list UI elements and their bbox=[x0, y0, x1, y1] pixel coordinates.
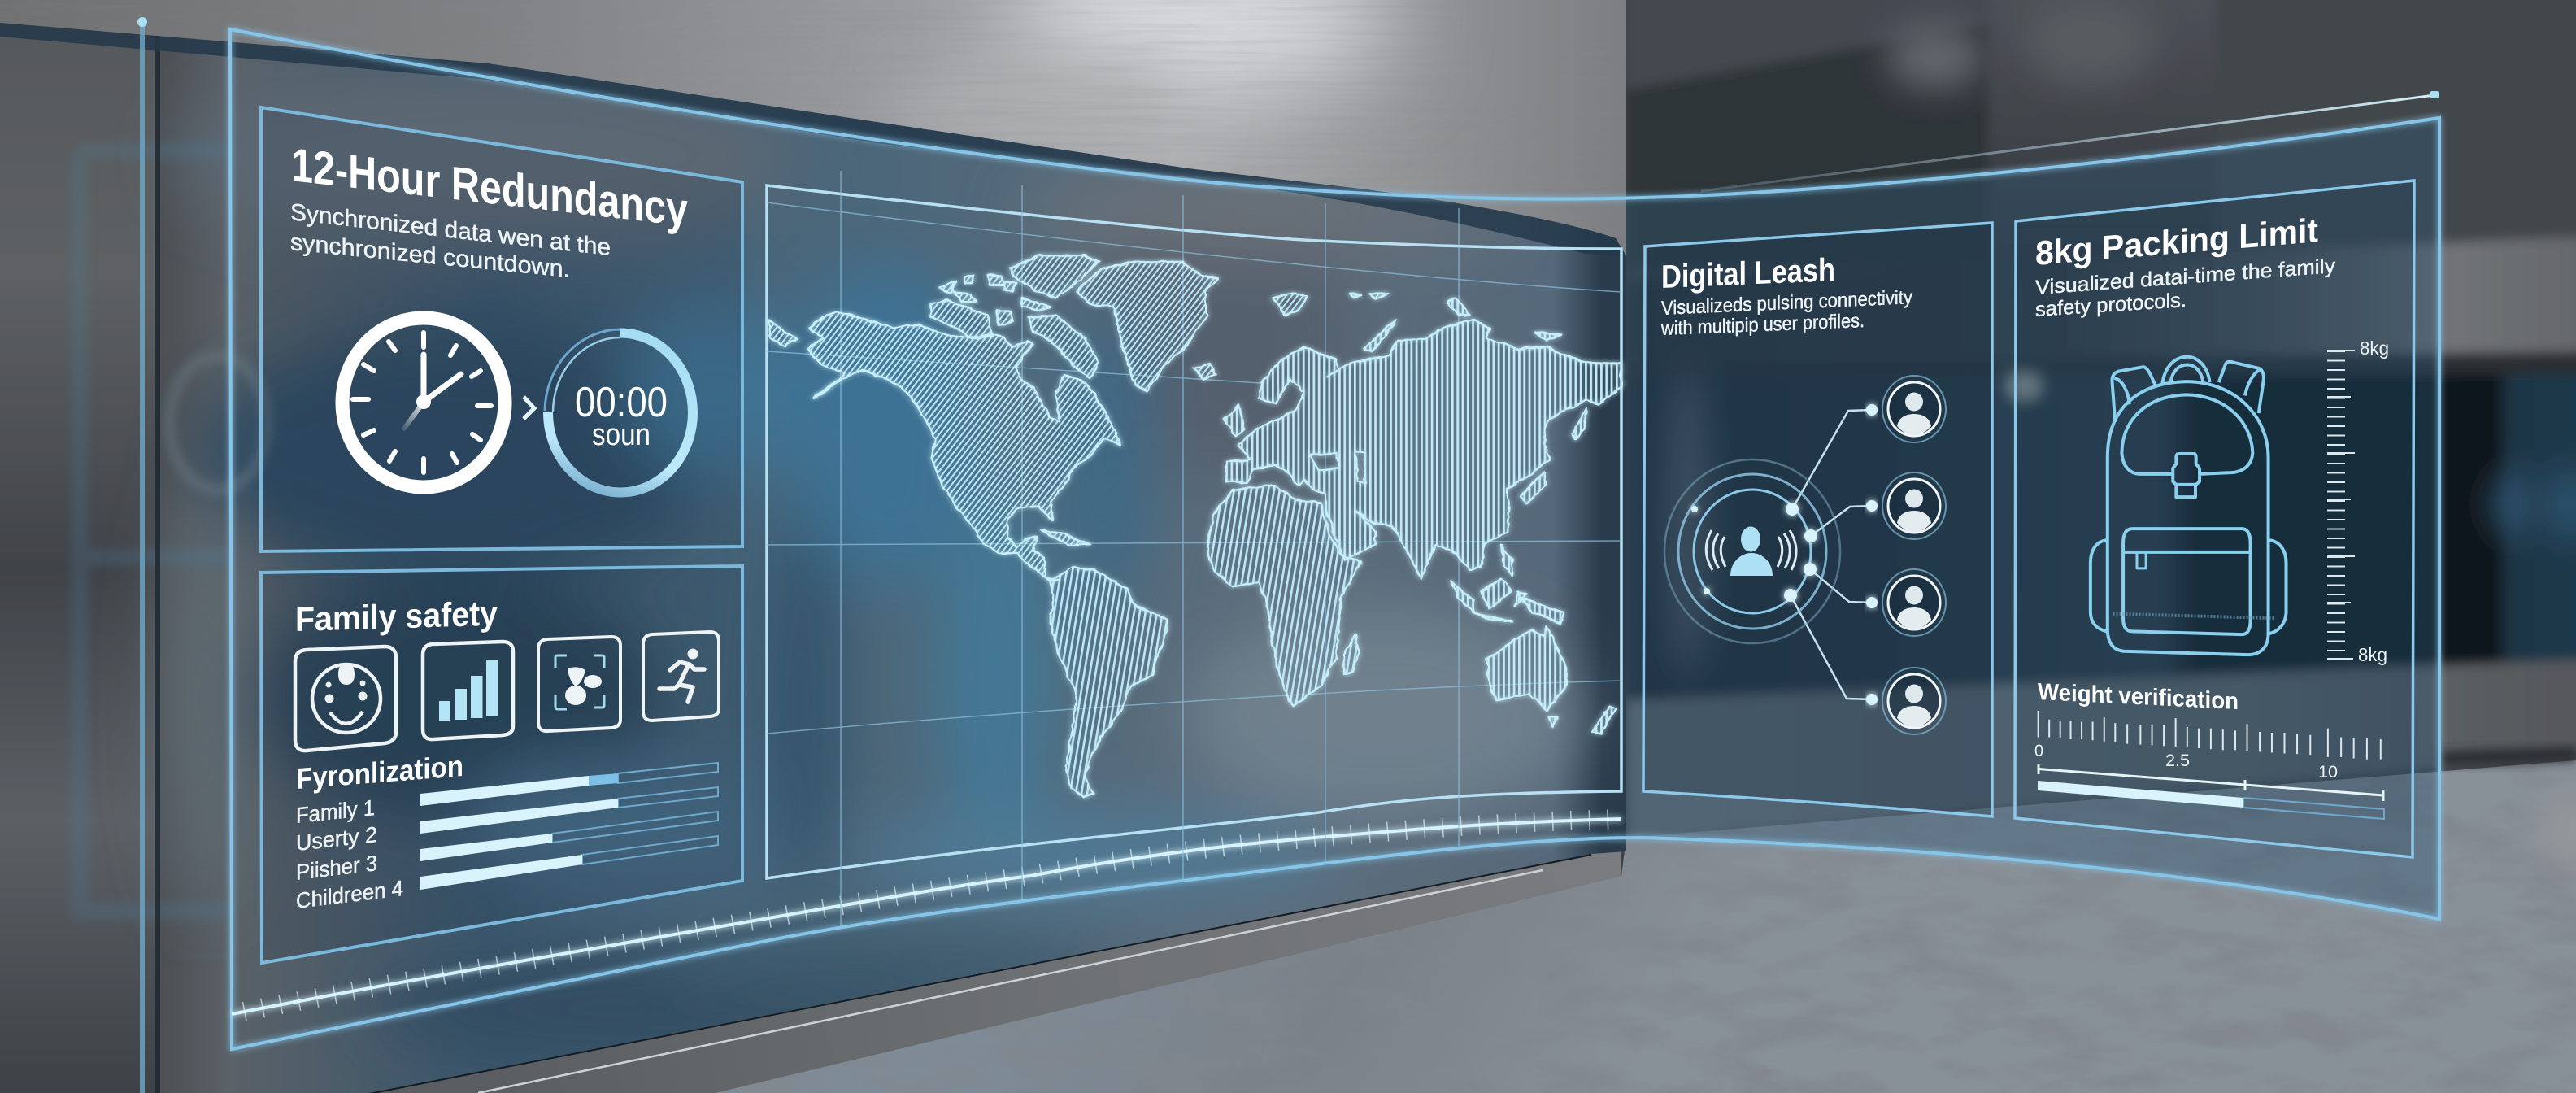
hatched eurasia and oceania bbox=[748, 221, 1660, 838]
vertical light post bbox=[137, 17, 147, 1093]
icon: signal bars tile bbox=[423, 642, 513, 739]
description: Visualizeds pulsing connectivity bbox=[1661, 286, 1912, 320]
arrow bbox=[524, 397, 534, 419]
panel: family safety bbox=[261, 566, 742, 963]
horizontal ruler: 10 bbox=[2318, 763, 2338, 782]
connectors bbox=[1791, 410, 1872, 699]
user avatar 1 bbox=[1882, 376, 1946, 442]
description: Visualized datai-time the family bbox=[2035, 255, 2336, 299]
user avatar 2 bbox=[1882, 472, 1946, 539]
horizontal ruler: 2.5 bbox=[2165, 751, 2190, 770]
icon: backpack bbox=[2091, 357, 2287, 655]
heading: Digital Leash bbox=[1661, 252, 1835, 295]
timeline ruler bbox=[232, 819, 1621, 1014]
description: safety protocols. bbox=[2035, 289, 2187, 321]
vertical weight scale bbox=[2327, 337, 2389, 665]
panel: 8kg packing limit bbox=[2015, 181, 2414, 857]
faint reflected panel frame bbox=[80, 150, 230, 911]
description: synchronized countdown. bbox=[290, 229, 570, 283]
far right upper wall bbox=[1626, 0, 2576, 846]
panel: digital leash bbox=[1643, 223, 1992, 816]
row labels: Userty 2 bbox=[296, 821, 377, 856]
dark seam bbox=[155, 0, 160, 1093]
vertical weight scale: 8kg bbox=[2360, 337, 2389, 359]
horizontal ruler: 0 bbox=[2034, 742, 2043, 760]
heading: 12-Hour Redundancy bbox=[291, 138, 689, 237]
icon: focus tile bbox=[538, 637, 620, 731]
countdown ring bbox=[545, 329, 693, 492]
heading: Family safety bbox=[295, 594, 498, 638]
hatched north america and greenland bbox=[769, 255, 1384, 580]
horizontal ruler bbox=[2034, 711, 2381, 782]
row labels bbox=[296, 795, 403, 913]
user avatar 3 bbox=[1882, 569, 1946, 636]
countdown ring: soun bbox=[592, 418, 651, 452]
row labels: Family 1 bbox=[296, 795, 375, 828]
panel: 12-hour redundancy bbox=[261, 107, 742, 551]
map grid bbox=[767, 171, 1621, 927]
concrete floor bbox=[715, 760, 2576, 1093]
row labels: Childreen 4 bbox=[296, 875, 403, 913]
heading: 8kg Packing Limit bbox=[2035, 211, 2318, 272]
glass top shadow band bbox=[0, 23, 1626, 256]
faint reflected ring bbox=[169, 356, 267, 490]
icon: running person tile bbox=[643, 632, 719, 721]
panel: world map bbox=[748, 171, 1660, 927]
vertical weight scale: 8kg bbox=[2358, 644, 2387, 665]
description bbox=[1660, 286, 1912, 340]
description bbox=[2035, 255, 2336, 321]
far-right glass tint bbox=[1626, 118, 2439, 919]
description: with multipip user profiles. bbox=[1660, 310, 1865, 340]
row labels: Piisher 3 bbox=[296, 850, 377, 885]
user avatar 4 bbox=[1882, 668, 1946, 734]
subheading: Fyronlization bbox=[296, 749, 463, 795]
end nodes bbox=[1866, 404, 1878, 705]
subheading: Weight verification bbox=[2038, 679, 2239, 715]
upper-right accent line bbox=[1701, 91, 2439, 191]
central pulsing hub bbox=[1664, 459, 1840, 643]
metal wall above glass bbox=[0, 0, 1626, 277]
hatched south america and africa bbox=[748, 221, 1660, 838]
icon: analog clock bbox=[342, 318, 505, 487]
skirting bbox=[369, 851, 1621, 1093]
weight progress bar bbox=[2038, 764, 2384, 819]
glowing coastlines bbox=[768, 255, 1621, 798]
icon: smiley tile bbox=[295, 647, 396, 751]
world map continents bbox=[764, 250, 1627, 800]
progress bars bbox=[420, 763, 718, 890]
countdown ring: 00:00 bbox=[575, 379, 668, 426]
description: Synchronized data wen at the bbox=[290, 199, 611, 261]
map frame bbox=[767, 185, 1621, 878]
glass wall with blurred reflections bbox=[0, 0, 1626, 1093]
